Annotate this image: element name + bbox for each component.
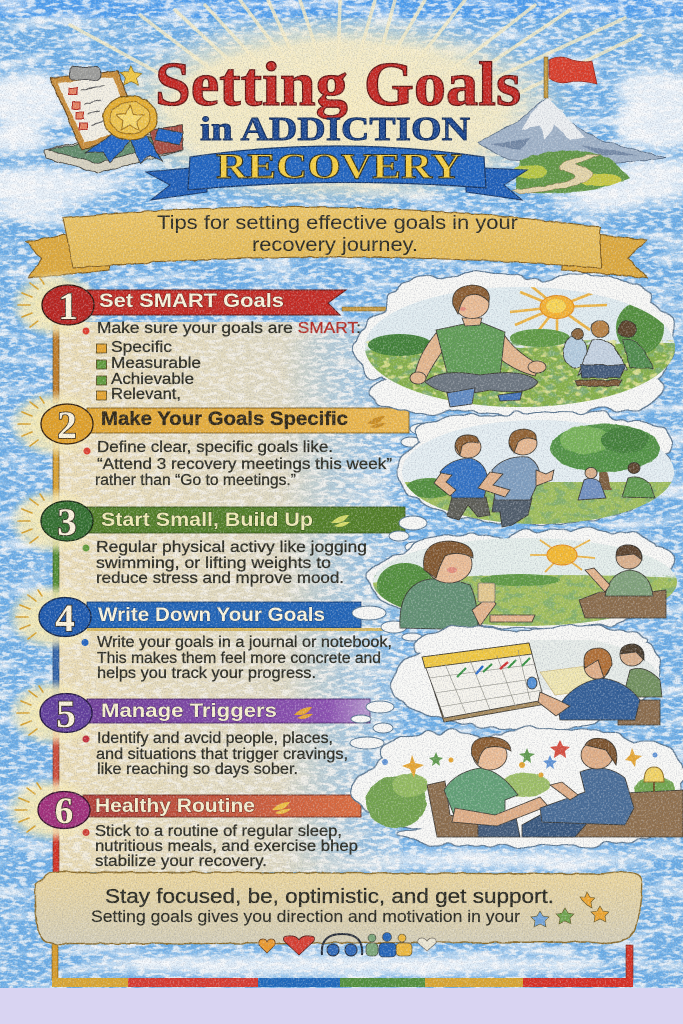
subtitle scroll — [26, 207, 647, 278]
body text: helps you track your progress. — [97, 665, 316, 682]
thought cloud — [355, 273, 674, 415]
number badge — [40, 694, 92, 732]
runner in blue — [434, 435, 490, 520]
icon: leaf — [331, 515, 350, 527]
checklist: Achievable — [111, 371, 194, 388]
bullet — [82, 328, 90, 334]
person in green shirt — [444, 737, 548, 837]
icon: outline heart — [418, 938, 436, 951]
section 5: Manage Triggers: 5 — [56, 693, 76, 736]
checklist — [96, 339, 201, 403]
grass — [360, 343, 680, 410]
body text: This makes them feel more concrete and — [97, 650, 381, 667]
body text: stabilize your recovery. — [95, 853, 267, 870]
body parchment panel — [58, 322, 403, 872]
icons: stars — [531, 892, 609, 927]
body text: swimming, or lifting weights to — [96, 555, 331, 572]
icon: leaf — [367, 416, 386, 428]
closing text: Setting goals gives you direction and motivation in your — [91, 908, 521, 926]
icon: small heart — [259, 939, 275, 953]
seated man on couch — [579, 545, 666, 618]
ribbon — [83, 795, 361, 817]
body text: rather than “Go to meetings.” — [95, 472, 296, 489]
heading: Set SMART Goals — [99, 291, 284, 312]
section 5: Manage Triggers — [7, 679, 370, 778]
icon: book stack — [44, 132, 183, 173]
closing scroll — [35, 872, 642, 945]
seated people — [578, 462, 655, 500]
body text: Make sure your goals are SMART : — [97, 320, 361, 337]
ribbon — [87, 290, 346, 315]
armchairs — [427, 781, 683, 837]
section 3: Start Small, Build Up — [8, 487, 405, 587]
body text: Identify and avcid people, places, — [97, 730, 333, 747]
section 4: Write Down Your Goals — [6, 583, 392, 682]
icon: flag — [544, 57, 597, 98]
icon: clipboard — [50, 67, 140, 150]
section 6: Healthy Routine: 6 — [55, 791, 73, 832]
body text: Stick to a routine of regular sleep, — [95, 823, 342, 840]
body text: Write your goals in a journal or notebook, — [97, 634, 392, 651]
heading: Start Small, Build Up — [101, 510, 313, 531]
icon: gold medal — [103, 96, 157, 140]
bottom lavender strip — [0, 988, 683, 1024]
checklist: Measurable — [111, 355, 201, 372]
number badge — [38, 792, 90, 828]
icon: lamp — [644, 767, 664, 792]
sun glow — [10, 271, 102, 339]
section 1: Set SMART Goals: 1 — [58, 285, 78, 328]
panel: scene 5 supportive conversation — [352, 729, 683, 846]
number badge — [42, 285, 94, 325]
body text: like reaching so days sober. — [97, 761, 298, 778]
body text: Regular physical activy like jogging — [96, 539, 367, 556]
icon: mountain with red flag and path — [477, 57, 666, 194]
number badge — [41, 501, 93, 541]
ribbon — [87, 699, 370, 723]
confetti stars — [382, 740, 658, 778]
section 4: Write Down Your Goals: 4 — [55, 597, 75, 640]
icon: sun — [510, 287, 607, 332]
icon: blue ribbons — [85, 128, 162, 163]
section 3: Start Small, Build Up: 3 — [57, 501, 77, 544]
checklist: Relevant, — [111, 386, 181, 403]
title: in ADDICTION: in ADDICTION — [200, 111, 471, 148]
icon: leaf — [294, 707, 313, 719]
subtitle scroll: recovery journey. — [252, 235, 418, 256]
heading: Make Your Goals Specific — [101, 409, 348, 430]
thought cloud — [398, 411, 670, 524]
man in denim jacket — [522, 738, 634, 837]
icon: calendar — [422, 643, 552, 722]
body text: and situations that trigger cravings, — [96, 746, 348, 763]
icon: tree — [550, 424, 660, 490]
title: Setting Goals: Setting Goals — [155, 51, 521, 119]
heading: Write Down Your Goals — [98, 605, 325, 626]
panel: scene 4 calendar planning — [392, 627, 670, 730]
frame line segments — [52, 307, 633, 987]
checklist: Specific — [111, 339, 172, 356]
section 2: Make Your Goals Specific — [8, 390, 409, 489]
body text — [96, 539, 367, 587]
icon: clipboard, book and medal — [44, 66, 183, 173]
thought bubbles — [350, 423, 440, 749]
icons: hearts, headphones, community — [259, 932, 436, 957]
body text — [97, 634, 392, 682]
heading: Manage Triggers — [101, 701, 277, 722]
runner in grey-blue — [478, 429, 554, 527]
body text: Define clear, specific goals like. — [97, 439, 333, 456]
icon: leaf — [272, 802, 291, 814]
ribbon — [87, 602, 361, 628]
body text: nutritious meals, and exercise bhep — [95, 838, 358, 855]
banner: RECOVERY — [146, 146, 527, 200]
body text — [95, 439, 392, 489]
icon: headphones — [322, 934, 362, 956]
closing headline: Stay focused, be, optimistic, and get support. — [105, 886, 554, 908]
body text — [96, 730, 348, 778]
icon: star — [120, 66, 142, 85]
number badge — [39, 598, 91, 636]
meditating person — [410, 285, 546, 407]
body text: “Attend 3 recovery meetings this week” — [97, 456, 392, 473]
two men — [538, 644, 662, 725]
panel: scene 1 meditating in the sun — [355, 273, 680, 415]
body text: reduce stress and mprove mood. — [96, 570, 344, 587]
icon: people — [366, 932, 412, 957]
icon: big heart — [284, 936, 314, 955]
section 1: Set SMART Goals — [10, 271, 361, 403]
subtitle text: Tips for setting effective goals in your — [157, 213, 519, 234]
sunburst rays and title glow — [70, 0, 640, 208]
section 2: Make Your Goals Specific: 2 — [57, 404, 77, 447]
panel: scene 3 conversation with drink — [368, 530, 680, 630]
thought cloud — [368, 530, 674, 627]
ribbon — [87, 507, 405, 533]
number badge — [41, 404, 93, 444]
banner text: RECOVERY — [216, 146, 462, 186]
thought cloud — [392, 627, 660, 730]
section 6: Healthy Routine — [5, 777, 361, 870]
ribbon — [87, 408, 409, 433]
group of seated people — [563, 321, 653, 386]
panel: scene 2 jogging friends — [398, 411, 680, 530]
icon: sun — [530, 540, 595, 572]
man with glass — [400, 541, 535, 630]
thought cloud — [352, 729, 683, 846]
body text — [95, 823, 358, 870]
heading: Healthy Routine — [95, 796, 255, 817]
